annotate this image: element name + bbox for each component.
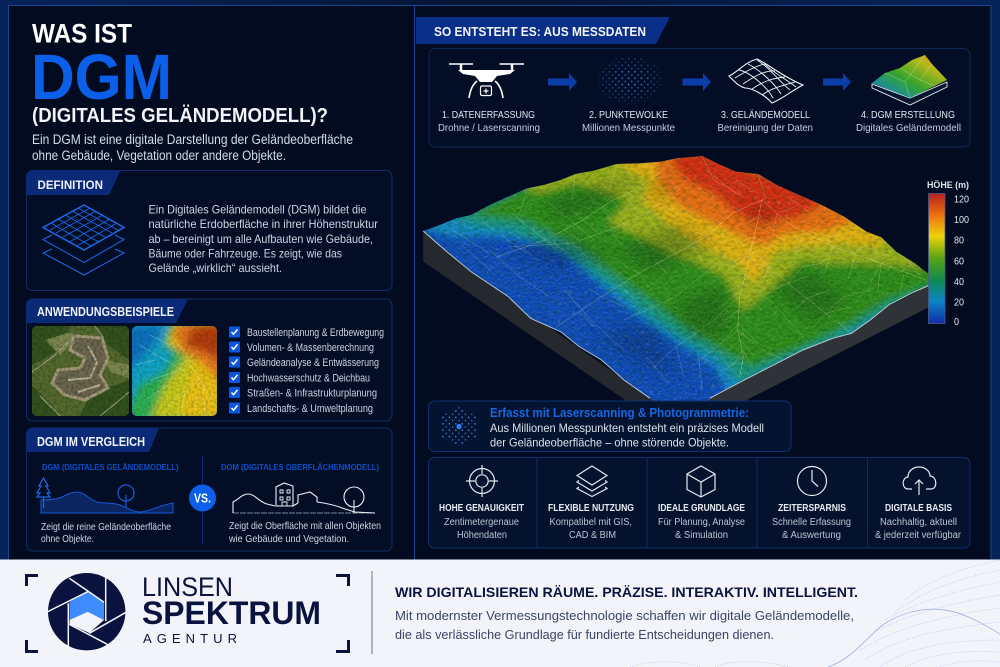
heading: definition: DEFINITION	[38, 178, 103, 192]
benefit: digitale basis: DIGITALE BASIS	[885, 503, 952, 514]
step labels: Millionen Messpunkte	[582, 122, 675, 134]
legend: height scale: 60	[954, 256, 964, 268]
intro text: ohne Gebäude, Vegetation oder andere Objekte.	[32, 148, 286, 163]
checklist: Volumen- & Massenberechnung	[247, 342, 374, 354]
title line: was ist: WAS IST	[32, 18, 132, 48]
caption: dom: wie Gebäude und Vegetation.	[228, 533, 349, 545]
definition text: Gelände „wirklich“ aussieht.	[148, 261, 282, 275]
title block	[31, 18, 353, 163]
icon: dem block	[872, 55, 947, 105]
callout text: der Geländeoberfläche – ohne störende Objekte.	[490, 436, 729, 450]
checklist: Geländeanalyse & Entwässerung	[247, 357, 379, 369]
image: aerial construction site	[32, 326, 129, 416]
benefit: flexible nutzung: FLEXIBLE NUTZUNG	[548, 503, 634, 514]
footer headline: WIR DIGITALISIEREN RÄUME. PRÄZISE. INTERAKTIV. INTELLIGENT.	[395, 584, 858, 600]
arrow: step 3 to 4	[823, 73, 851, 91]
icon: point hexagon	[441, 407, 477, 446]
vs badge: VS.	[194, 492, 211, 506]
decorative blue wave line	[828, 609, 1000, 667]
legend: height scale	[927, 180, 969, 328]
definition text: ab – bereinigt um alle Aufbauten wie Gebäude,	[148, 232, 373, 246]
title line: digitales geländemodell: (DIGITALES GELÄNDEMODELL)?	[32, 104, 328, 127]
panel: benefits	[428, 458, 970, 548]
diagram: dom surface	[233, 483, 375, 513]
benefit: hohe genauigkeit: Höhendaten	[457, 530, 507, 541]
benefit: zeitersparnis: & Auswertung	[782, 530, 841, 541]
step labels: Drohne / Laserscanning	[438, 122, 540, 134]
logo wordmark: LINSEN	[142, 572, 233, 602]
legend: height scale: 80	[954, 234, 964, 246]
step labels: Bereinigung der Daten	[718, 122, 813, 134]
title: DGM: DGM	[31, 41, 172, 113]
legend: height scale: HÖHE (m)	[927, 180, 969, 191]
heading: anwendungsbeispiele: ANWENDUNGSBEISPIELE	[37, 305, 174, 319]
checklist: Straßen- & Infrastrukturplanung	[247, 388, 377, 400]
panel frame: left column	[8, 6, 414, 560]
panel: process steps	[429, 48, 970, 147]
logo wordmark	[142, 572, 321, 646]
benefit: hohe genauigkeit	[439, 465, 524, 541]
benefit: zeitersparnis: ZEITERSPARNIS	[778, 503, 846, 514]
arrow: step 2 to 3	[682, 73, 711, 91]
step labels: 2. PUNKTEWOLKE	[589, 109, 668, 121]
panel: definition	[26, 170, 392, 290]
legend: height scale: 40	[954, 276, 964, 288]
arrow: step 1 to 2	[548, 73, 577, 91]
heading: so entsteht es	[416, 17, 670, 44]
caption: dom: Zeigt die Oberfläche mit allen Objekten	[229, 520, 381, 532]
checklist	[229, 326, 384, 415]
intro text	[32, 132, 353, 163]
legend: height scale: 20	[954, 296, 964, 308]
definition text: Bäume oder Fahrzeuge. Es zeigt, wie das	[148, 246, 342, 260]
legend: height scale: 120	[954, 194, 969, 206]
caption: dgm: Zeigt die reine Geländeoberfläche	[41, 521, 171, 533]
benefit: zeitersparnis	[772, 466, 851, 541]
definition text: Ein Digitales Geländemodell (DGM) bildet die	[148, 202, 367, 216]
caption: dom	[228, 520, 381, 545]
definition text	[148, 202, 378, 275]
benefit: flexible nutzung: CAD & BIM	[569, 530, 616, 541]
benefit: digitale basis: & jederzeit verfügbar	[875, 530, 962, 541]
panel: dgm im vergleich	[26, 428, 392, 551]
step labels	[438, 109, 961, 134]
benefit: digitale basis: Nachhaltig, aktuell	[880, 517, 957, 528]
icon: point cloud	[598, 56, 662, 104]
icon: drone	[449, 64, 524, 98]
label: dgm: DGM (DIGITALES GELÄNDEMODELL)	[42, 462, 179, 472]
icon: terrain wireframe	[729, 59, 803, 103]
icon: grid layers	[43, 205, 124, 275]
benefit: flexible nutzung: Kompatibel mit GIS,	[550, 517, 632, 528]
logo icon: aperture	[47, 573, 127, 650]
callout text	[490, 421, 764, 450]
logo frame brackets	[26, 576, 348, 652]
step labels: 3. GELÄNDEMODELL	[721, 109, 810, 121]
step labels: Digitales Geländemodell	[856, 122, 961, 134]
benefit: ideale grundlage: & Simulation	[675, 530, 728, 541]
logo wordmark: AGENTUR	[143, 631, 237, 646]
benefit: ideale grundlage: Für Planung, Analyse	[658, 517, 746, 528]
benefit: flexible nutzung	[548, 466, 634, 541]
intro text: Ein DGM ist eine digitale Darstellung der Geländeoberfläche	[32, 132, 353, 147]
callout text: Aus Millionen Messpunkten entsteht ein präzises Modell	[490, 421, 764, 435]
checklist: Landschafts- & Umweltplanung	[247, 403, 373, 415]
footer text	[395, 609, 854, 642]
diagram: dgm terrain	[37, 478, 173, 513]
heading: anwendungsbeispiele	[26, 299, 188, 323]
benefit: hohe genauigkeit: HOHE GENAUIGKEIT	[439, 503, 524, 514]
vs badge	[189, 456, 216, 544]
heading: so entsteht es: SO ENTSTEHT ES: AUS MESSDATEN	[434, 24, 646, 39]
label: dom: DOM (DIGITALES OBERFLÄCHENMODELL)	[221, 462, 379, 472]
chart: 3d terrain model	[422, 156, 928, 400]
caption: dgm: ohne Objekte.	[41, 533, 94, 545]
benefit: digitale basis	[875, 467, 962, 541]
heading: definition	[26, 170, 120, 195]
footer band	[0, 560, 1000, 667]
image: elevation heat map	[132, 326, 217, 416]
checklist: Hochwasserschutz & Deichbau	[247, 372, 370, 384]
logo wordmark: SPEKTRUM	[142, 595, 321, 631]
step labels: 4. DGM ERSTELLUNG	[861, 109, 955, 121]
caption: dgm	[41, 521, 171, 545]
step labels: 1. DATENERFASSUNG	[442, 109, 535, 121]
legend: height scale: 0	[954, 316, 959, 328]
panel frame: right column	[414, 6, 991, 560]
legend: height scale: 100	[954, 214, 969, 226]
benefit: zeitersparnis: Schnelle Erfassung	[772, 517, 851, 528]
definition text: natürliche Erdoberfläche in ihrer Höhenstruktur	[148, 217, 378, 231]
benefit: ideale grundlage: IDEALE GRUNDLAGE	[658, 503, 745, 514]
benefit: ideale grundlage	[658, 466, 746, 541]
callout heading: Erfasst mit Laserscanning & Photogrammetrie:	[490, 406, 749, 420]
heading: dgm im vergleich	[26, 428, 159, 452]
footer text: Mit modernster Vermessungstechnologie schaffen wir digitale Geländemodelle,	[395, 609, 854, 623]
benefit: hohe genauigkeit: Zentimetergenaue	[444, 517, 520, 528]
callout: laserscanning	[428, 401, 791, 452]
checklist: Baustellenplanung & Erdbewegung	[247, 327, 384, 339]
panel: anwendungsbeispiele	[26, 299, 392, 421]
heading: dgm im vergleich: DGM IM VERGLEICH	[37, 435, 145, 449]
footer text: die als verlässliche Grundlage für fundierte Entscheidungen dienen.	[395, 628, 774, 642]
decorative dotted waves	[630, 560, 1000, 667]
